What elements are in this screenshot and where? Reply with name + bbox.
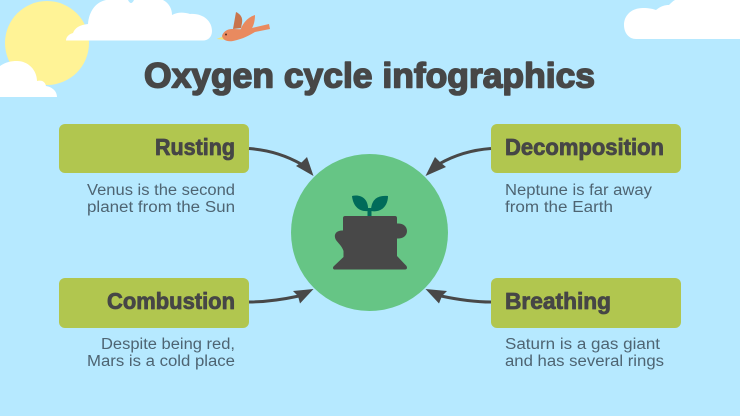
label box: combustion [59, 278, 249, 328]
label box: rusting [59, 124, 249, 173]
cloud: lower left [0, 61, 57, 97]
description: breathing: Saturn is a gas giant [505, 336, 661, 353]
panel: breathing [491, 278, 681, 370]
description: breathing: and has several rings [505, 353, 664, 370]
label box: breathing [491, 278, 681, 328]
panel: combustion [59, 278, 249, 370]
panel: decomposition [491, 124, 681, 216]
heading: breathing: Breathing [505, 288, 611, 314]
cloud: top left [66, 0, 212, 40]
icon: bird [216, 12, 270, 41]
cloud: top right [624, 0, 740, 39]
heading: rusting: Rusting [155, 134, 235, 160]
heading: combustion: Combustion [107, 288, 235, 314]
description: decomposition: from the Earth [505, 199, 613, 216]
description: combustion: Mars is a cold place [87, 353, 235, 370]
description: combustion: Despite being red, [101, 336, 235, 353]
description: decomposition: Neptune is far away [505, 182, 652, 199]
icon: sun [5, 1, 89, 85]
panel: rusting [59, 124, 249, 216]
icon: tree stump with sprout [333, 196, 407, 270]
arrow: breathing to circle [426, 289, 491, 304]
arrow: decomposition to circle [426, 148, 491, 176]
label box: decomposition [491, 124, 681, 173]
heading: decomposition: Decomposition [505, 134, 664, 160]
description: rusting: planet from the Sun [87, 199, 235, 216]
title: Oxygen cycle infographics [144, 56, 595, 96]
description: rusting: Venus is the second [87, 182, 235, 199]
central circle [291, 154, 448, 311]
arrow: rusting to circle [249, 148, 314, 176]
arrow: combustion to circle [249, 289, 314, 304]
